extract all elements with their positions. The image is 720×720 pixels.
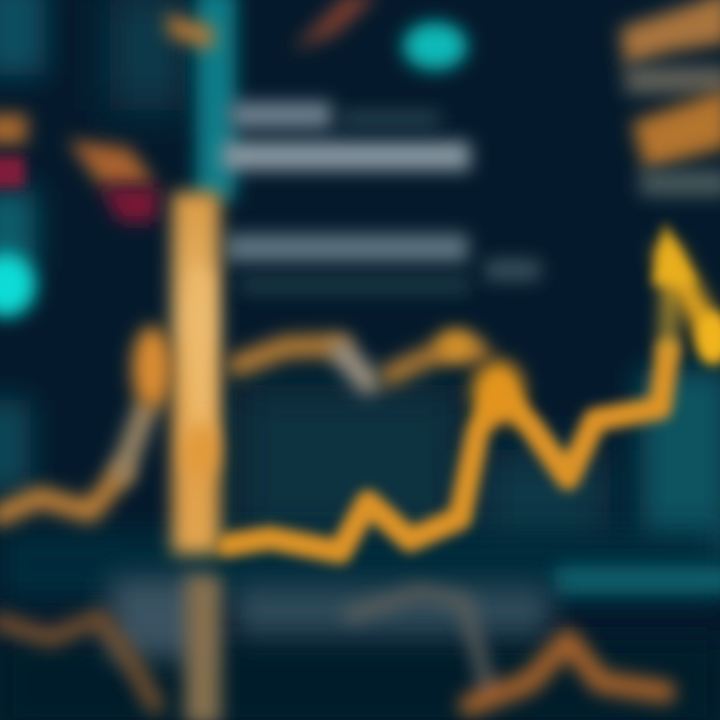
- text block: blurred body lines: [226, 234, 540, 292]
- icon: orange and red marks top: [165, 0, 378, 50]
- icon: teal blob top: [403, 22, 467, 70]
- chart: upper price line: [238, 330, 480, 382]
- text block: blurred heading lines: [222, 102, 470, 170]
- chart: main price line: [0, 222, 720, 552]
- icon: orange stripes top right: [620, 0, 720, 196]
- panel: grey reflection band: [110, 578, 550, 658]
- chart: reflected line: [0, 575, 665, 720]
- icon: left orange and crimson marks: [0, 114, 160, 222]
- icon: cyan blob left: [0, 253, 36, 317]
- panel: teal strip lower right: [555, 566, 720, 594]
- panel: teal vertical band: [196, 0, 236, 200]
- chart: tall orange candle: [172, 192, 220, 554]
